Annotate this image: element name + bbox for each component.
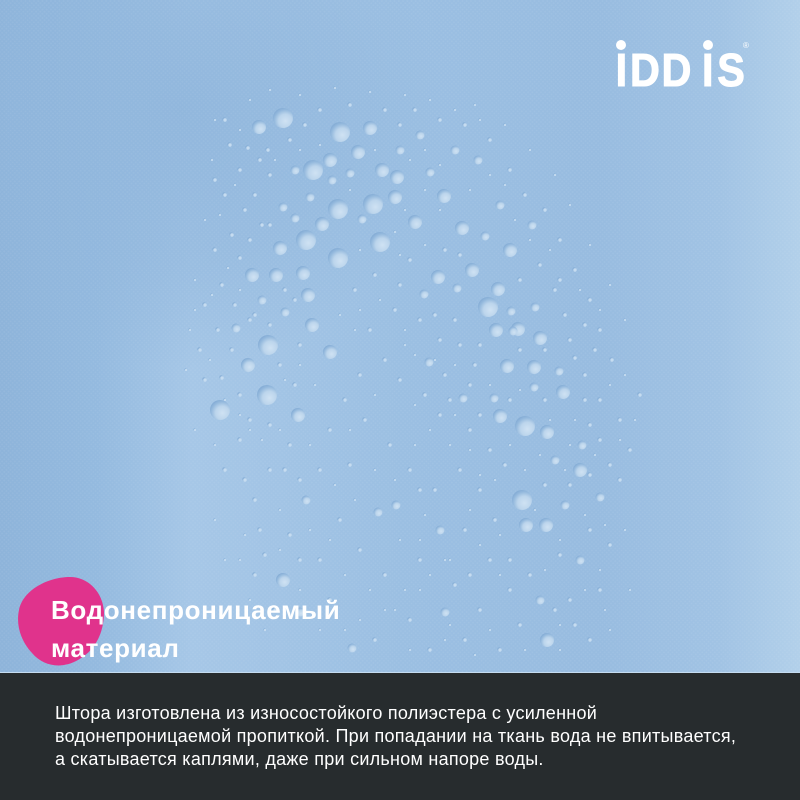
description text: а скатывается каплями, даже при сильном напоре воды. <box>55 749 544 769</box>
heading <box>51 595 340 662</box>
description text: Штора изготовлена из износостойкого полиэстера с усиленной <box>55 703 597 723</box>
description text: водонепроницаемой пропиткой. При попадании на ткань вода не впитывается, <box>55 726 736 746</box>
small water droplets <box>185 87 640 655</box>
logo: IDDIS: IDDIS <box>616 45 745 97</box>
description text <box>55 703 736 769</box>
large and medium water droplets <box>210 108 604 652</box>
logo: IDDIS: ® <box>743 41 749 50</box>
heading: материал <box>51 632 180 662</box>
dark description panel <box>0 672 800 800</box>
heading: Водонепроницаемый <box>51 595 340 625</box>
pink blob behind heading <box>18 577 104 666</box>
